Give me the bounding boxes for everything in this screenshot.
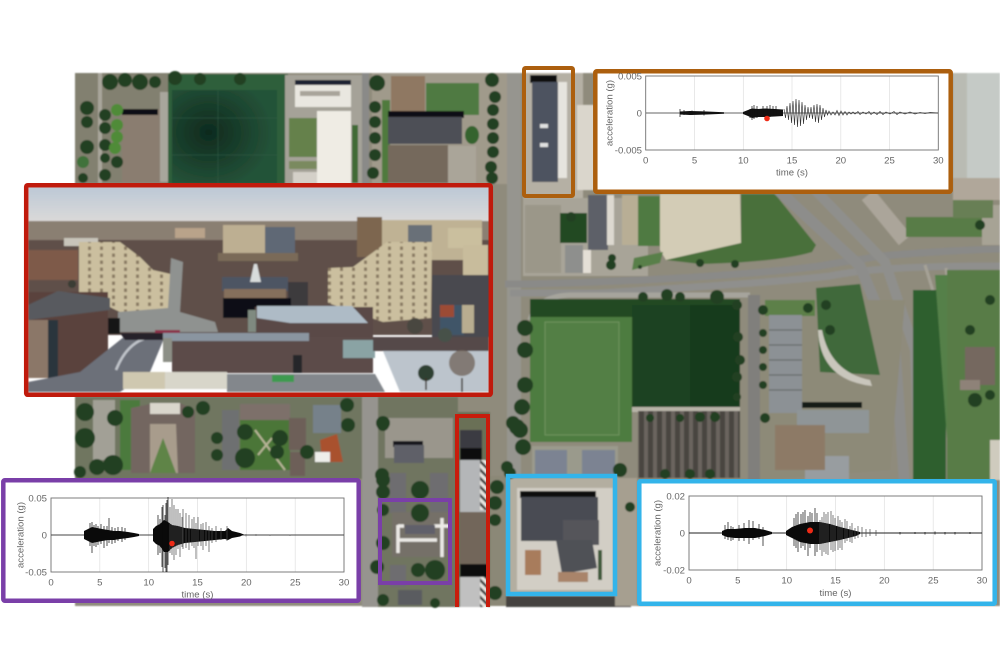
panel: purple building acceleration chart — [3, 480, 359, 601]
chart grid and axes — [646, 76, 938, 150]
x axis title: time (s) — [820, 588, 851, 599]
x tick labels: 25 — [928, 576, 939, 586]
y tick labels: -0.05 — [25, 568, 47, 578]
map: light green tree canopy — [109, 104, 123, 154]
x tick labels: 15 — [787, 156, 797, 166]
map: north-east parking — [953, 73, 1000, 218]
map: building under blue marker — [490, 476, 637, 607]
y tick labels: 0 — [42, 530, 47, 542]
x tick labels: 15 — [830, 576, 841, 586]
x tick labels: 20 — [835, 156, 846, 166]
photo: far centre towers — [223, 225, 265, 255]
map: apartments — [760, 284, 905, 480]
y tick labels: -0.005 — [615, 146, 642, 156]
waveform — [51, 497, 344, 572]
y axis title: acceleration (g) — [16, 502, 26, 568]
x tick labels: 30 — [339, 578, 349, 588]
x tick labels: 0 — [48, 578, 54, 588]
y tick labels — [615, 72, 642, 156]
x tick labels: 20 — [241, 578, 252, 588]
map: eastern green corridor — [906, 205, 1000, 480]
map: tennis courts and parking lot — [532, 411, 740, 478]
x tick labels: 0 — [686, 576, 692, 586]
x tick labels: 5 — [97, 578, 102, 588]
photo: left brick building — [28, 292, 108, 378]
aerial map — [74, 71, 1000, 608]
x tick labels: 30 — [933, 156, 944, 166]
x tick labels: 15 — [192, 578, 203, 588]
marker: brown building outline — [524, 68, 573, 196]
panel: photo of building collapse, red frame — [26, 185, 491, 395]
map: strip under red marker — [458, 412, 490, 607]
map: central parking and plaza — [523, 194, 816, 276]
map: roads and junction — [505, 190, 1000, 490]
y tick labels — [25, 494, 47, 578]
y tick labels: -0.02 — [663, 566, 685, 576]
photo: collapsing right tower — [328, 242, 432, 322]
marker: purple building outline — [380, 500, 450, 583]
map: south-central block — [378, 397, 458, 607]
photo: sky — [28, 187, 490, 223]
y axis title: acceleration (g) — [652, 500, 664, 566]
panel: blue building acceleration chart — [639, 481, 995, 604]
x tick labels: 25 — [290, 578, 301, 588]
x tick labels — [48, 578, 349, 588]
x tick labels: 10 — [143, 578, 154, 588]
map: south-west campus — [75, 397, 378, 607]
x tick labels: 10 — [738, 156, 749, 166]
photo: road — [28, 336, 165, 392]
map: trees — [74, 71, 995, 608]
waveform — [689, 508, 982, 556]
chart grid and axes — [689, 496, 982, 570]
map: north-central block — [372, 73, 521, 606]
map: building under brown marker — [523, 73, 597, 198]
x tick labels: 20 — [879, 576, 890, 586]
y tick labels: 0.02 — [666, 492, 685, 502]
photo: distant city — [28, 221, 490, 251]
x tick labels: 5 — [735, 576, 740, 586]
x tick labels: 0 — [643, 156, 648, 166]
panel: brown building acceleration chart — [595, 71, 951, 192]
x axis title: time (s) — [182, 590, 213, 600]
y tick labels: 0 — [637, 108, 642, 120]
x tick labels: 30 — [977, 576, 987, 586]
y axis title: acceleration (g) — [604, 80, 616, 146]
photo: far right towers — [357, 217, 382, 257]
y tick labels: 0.05 — [28, 494, 47, 504]
x tick labels: 10 — [781, 576, 792, 586]
photo: right side buildings — [432, 275, 490, 337]
photo: smoke — [118, 258, 218, 332]
event marker — [169, 541, 175, 546]
x tick labels: 25 — [884, 156, 895, 166]
x tick labels: 5 — [692, 156, 697, 166]
x axis title: time (s) — [776, 168, 808, 178]
photo: large brown centre building — [172, 333, 373, 373]
marker: red building outline — [457, 416, 488, 607]
y tick labels: 0.005 — [618, 72, 642, 82]
event marker — [807, 528, 813, 534]
chart grid and axes — [51, 498, 344, 572]
map: soccer fields — [530, 299, 740, 442]
y tick labels — [663, 492, 685, 576]
y tick labels: 0 — [680, 528, 685, 540]
photo: snowy yard — [227, 374, 385, 392]
map: north-west block — [75, 73, 369, 184]
x tick labels — [686, 576, 987, 586]
photo: domed hall — [222, 277, 288, 291]
marker: blue building outline — [508, 476, 615, 594]
photo: low white buildings — [123, 372, 227, 389]
event marker — [764, 116, 770, 121]
x tick labels — [643, 156, 944, 166]
photo: collapsing left tower — [79, 242, 175, 315]
photo: trees — [418, 365, 434, 381]
waveform — [646, 99, 938, 127]
